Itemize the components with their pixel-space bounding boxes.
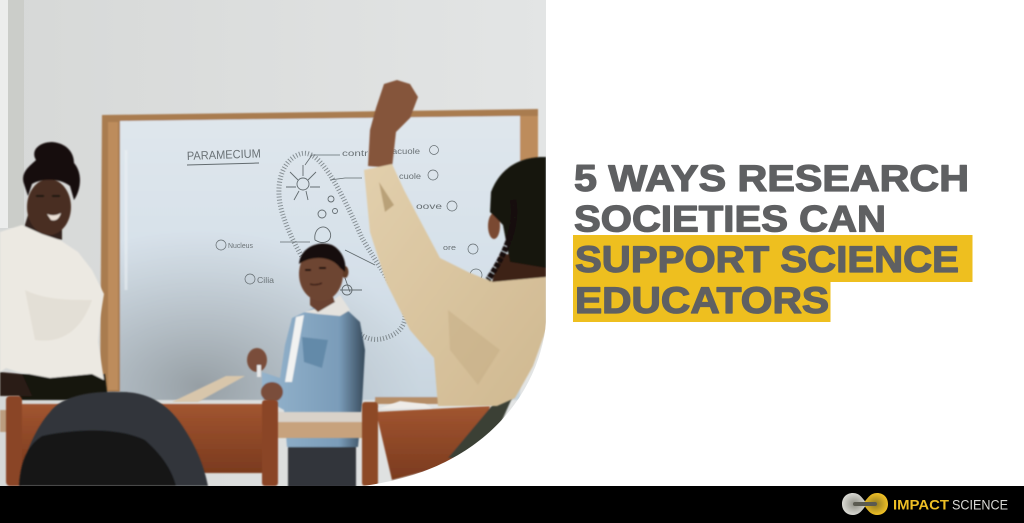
board drawing: paramecium diagram: [187, 146, 482, 339]
footer bar: [0, 486, 1024, 523]
teacher's arm: [0, 372, 32, 396]
boy's white shirt: [285, 315, 304, 382]
board handwriting labels: Nucleus: [228, 243, 253, 250]
wall background: [0, 0, 546, 486]
board handwriting labels: oove: [416, 202, 443, 211]
student's braid: [488, 200, 514, 280]
boy's jeans: [288, 445, 356, 487]
teacher's eyes: [36, 195, 60, 197]
board handwriting labels: ore: [443, 243, 456, 252]
title: SOCIETIES CAN: [574, 198, 886, 240]
teacher's skirt: [15, 374, 108, 400]
student's hair: [490, 157, 546, 268]
loose paper sheet: [172, 376, 245, 402]
logo wordmark: [893, 498, 1008, 512]
teacher's head: [27, 179, 71, 235]
student's forearm and hand: [368, 80, 418, 168]
boy's hands: [247, 348, 267, 372]
board handwriting labels: [187, 146, 456, 285]
boy's jacket: [262, 306, 365, 447]
boy's jacket pocket: [302, 337, 328, 368]
board handwriting labels: Cilia: [257, 275, 274, 285]
logo: Impact Science: [842, 493, 1008, 515]
window frame at left: [0, 0, 24, 228]
boy's hood: [304, 295, 350, 316]
title: EDUCATORS: [575, 279, 829, 321]
board handwriting labels: PARAMECIUM: [187, 146, 261, 163]
student with raised hand: [364, 80, 546, 406]
teacher's sweater: [0, 225, 104, 380]
backpack on chair: [19, 392, 208, 486]
title: 5 WAYS RESEARCH: [574, 157, 969, 199]
teacher's neck: [24, 215, 62, 240]
marker: [257, 365, 261, 377]
board handwriting labels: cuole: [399, 172, 422, 181]
student's neck: [492, 250, 546, 282]
boy's neck: [309, 296, 336, 312]
paper on desk: [378, 401, 432, 409]
chair right: [362, 398, 512, 486]
board handwriting labels: acuole: [392, 147, 421, 156]
whiteboard with wooden frame: [100, 109, 538, 404]
boy's hair: [299, 244, 345, 272]
boy's ear: [342, 266, 348, 278]
teacher: [0, 142, 108, 400]
photo: classroom scene with curved edge: [0, 0, 546, 487]
desk: [0, 410, 366, 438]
heading highlight: [573, 235, 972, 322]
board handwriting labels: contr: [342, 149, 368, 158]
title: [574, 157, 969, 321]
title: SUPPORT SCIENCE: [575, 238, 959, 280]
chair left: [6, 396, 278, 486]
teacher's hair: [23, 142, 80, 200]
logo wordmark: IMPACT: [893, 498, 950, 512]
boy's eyes: [305, 268, 326, 270]
teacher's smile: [47, 213, 61, 220]
logo wordmark: SCIENCE: [952, 498, 1008, 512]
boy in denim jacket: [247, 244, 365, 487]
student's sleeve and back: [364, 164, 546, 406]
logo mark: [842, 493, 888, 515]
boy's head: [298, 257, 344, 298]
student's ear: [488, 213, 500, 239]
boy's mouth: [310, 283, 322, 285]
